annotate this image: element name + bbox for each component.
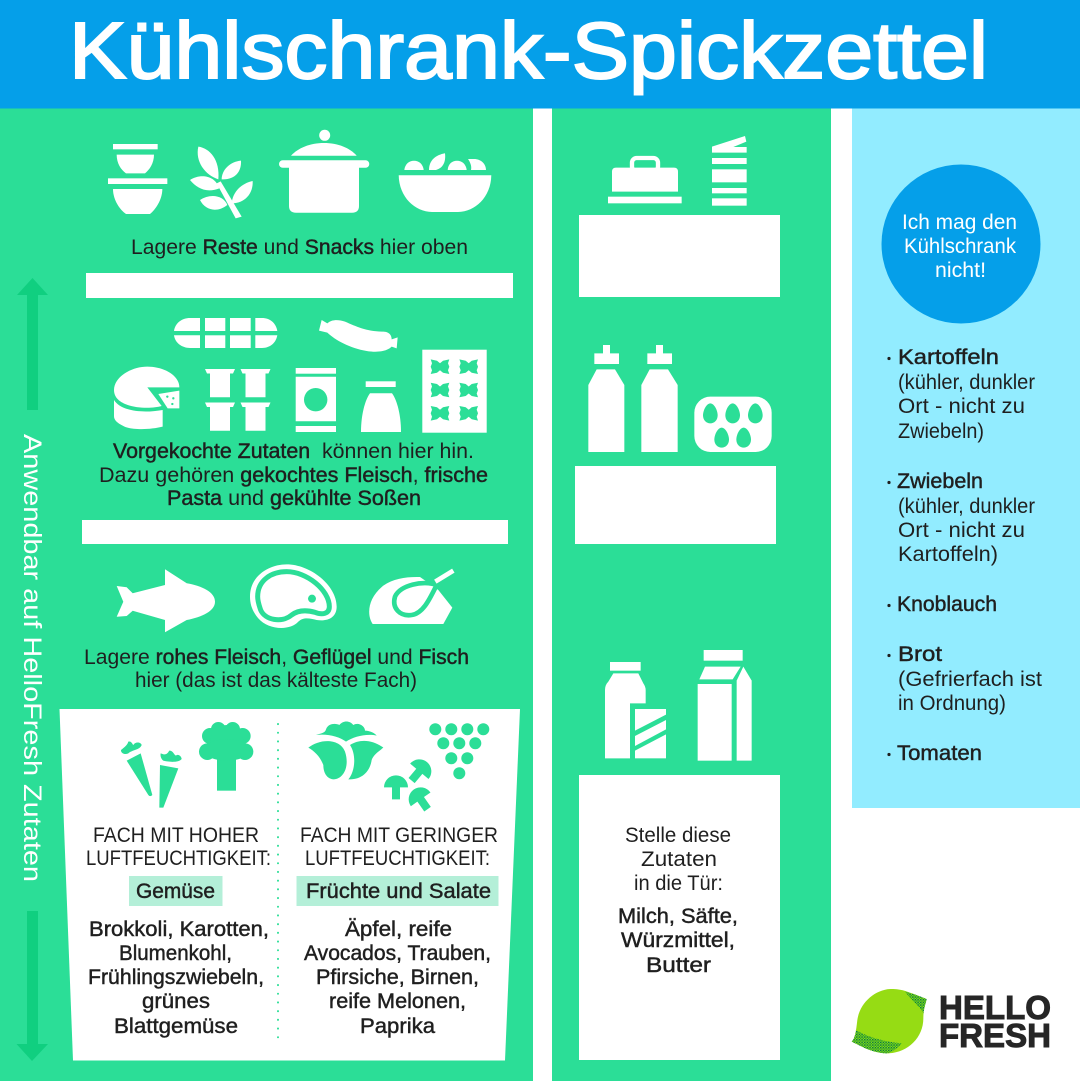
text: fruit list — [304, 918, 491, 1038]
list item: potatoes: Zwiebeln) — [898, 420, 984, 443]
text: vegetable list: grünes — [142, 990, 210, 1013]
text: fruit list: Äpfel, reife — [345, 918, 452, 941]
icon: milk carton — [698, 650, 752, 761]
text: door items: Milch, Säfte, — [618, 905, 738, 928]
text: bottom shelf caption: Lagere rohes Fleisch, Geflügel und Fisch — [84, 646, 469, 669]
label: fruit and salads: Früchte und Salate — [306, 880, 491, 903]
text: low humidity heading: LUFTFEUCHTIGKEIT: — [305, 847, 490, 870]
door shelf: bottom with text — [579, 775, 780, 1060]
text: door items — [618, 905, 738, 977]
shelf: top shelf bar — [86, 273, 513, 298]
text: vertical side label: Anwendbar auf HelloFresh Zutaten — [18, 434, 46, 882]
text: fruit list: Pfirsiche, Birnen, — [316, 966, 479, 989]
list item: bread: (Gefrierfach ist — [898, 668, 1042, 691]
list item: potatoes: Ort - nicht zu — [898, 395, 1025, 418]
icon: fish — [117, 569, 215, 632]
text: low humidity heading — [300, 824, 498, 870]
icon: herb sprig — [190, 147, 253, 218]
text: door items: Würzmittel, — [621, 929, 735, 952]
panel: fridge shelves — [0, 108, 533, 1081]
icon: sauce bottles — [588, 345, 678, 452]
logo: HelloFresh — [852, 989, 1051, 1054]
icon: steak — [250, 564, 337, 628]
icon: lettuce — [308, 721, 383, 779]
text: fruit list: Avocados, Trauben, — [304, 942, 491, 965]
panel: crisper drawers — [60, 709, 520, 1060]
text: vegetable list — [88, 918, 269, 1038]
text: high humidity heading: LUFTFEUCHTIGKEIT: — [86, 847, 271, 870]
label: vegetables — [129, 876, 222, 906]
text: vegetable list: Blattgemüse — [114, 1015, 238, 1038]
text: high humidity heading: FACH MIT HOHER — [93, 824, 259, 847]
label: vegetables: Gemüse — [136, 880, 215, 903]
list item: bread: Brot — [898, 643, 942, 666]
door shelf: middle — [575, 466, 776, 544]
list item: onions: (kühler, dunkler — [898, 495, 1035, 518]
text: door instruction: Stelle diese — [625, 824, 731, 847]
list item: bread — [887, 643, 1042, 715]
text: middle shelf caption: Pasta und gekühlte Soßen — [167, 487, 421, 510]
text: high humidity heading — [86, 824, 271, 870]
icon: butter dish — [608, 158, 682, 203]
text: bottom shelf caption — [84, 646, 469, 692]
icon: sauce pack — [296, 368, 336, 432]
text: vegetable list: Frühlingszwiebeln, — [88, 966, 264, 989]
text: vegetable list: Brokkoli, Karotten, — [89, 918, 269, 941]
icon: poultry — [369, 571, 453, 624]
list item: potatoes — [887, 346, 1035, 443]
text: door items: Butter — [646, 954, 711, 977]
icon: broccoli — [199, 722, 253, 791]
text: top shelf caption: Lagere Reste und Snacks hier oben — [131, 236, 468, 259]
icon: sausage — [319, 320, 398, 352]
wordmark — [939, 989, 1051, 1054]
icon: fresh pasta box — [422, 350, 487, 433]
list item: onions: Ort - nicht zu — [898, 519, 1025, 542]
callout: dislike the fridge — [882, 164, 1040, 324]
text: door instruction: in die Tür: — [634, 872, 723, 895]
arrow: down — [16, 911, 48, 1061]
list item: garlic: Knoblauch — [897, 593, 997, 616]
list: items to keep out of the fridge — [887, 346, 1042, 765]
text: fruit list: Paprika — [360, 1015, 435, 1038]
title: Kühlschrank-Spickzettel — [69, 6, 988, 95]
icon: milk bottle and juice — [605, 662, 666, 758]
callout: dislike the fridge: nicht! — [935, 259, 986, 282]
icon: yoghurt cups — [205, 369, 270, 431]
text: middle shelf caption: Vorgekochte Zutaten können hier hin. — [113, 440, 474, 463]
icon: egg tray — [694, 397, 772, 452]
icon: stacked containers — [108, 144, 167, 214]
icon: stack of cheese slices — [712, 136, 747, 206]
list item: tomatoes: Tomaten — [897, 742, 982, 765]
arrow: up — [17, 278, 48, 410]
text: door instruction: Zutaten — [641, 848, 717, 871]
list item: potatoes: Kartoffeln — [898, 346, 999, 369]
list item: onions: Zwiebeln — [897, 470, 983, 493]
text: low humidity heading: FACH MIT GERINGER — [300, 824, 498, 847]
icon: mushrooms — [384, 754, 437, 816]
text: fruit list: reife Melonen, — [329, 990, 466, 1013]
icon: cooking pot — [279, 130, 369, 213]
header band — [0, 0, 1080, 108]
list item: bread: in Ordnung) — [898, 692, 1006, 715]
text: bottom shelf caption: hier (das ist das kälteste Fach) — [135, 669, 417, 692]
list item: onions: Kartoffeln) — [898, 543, 998, 566]
icon: sliced tofu block — [174, 318, 277, 348]
text: middle shelf caption — [99, 440, 488, 510]
icon: lime — [852, 989, 927, 1053]
text: vegetable list: Blumenkohl, — [119, 942, 232, 965]
callout: dislike the fridge: Kühlschrank — [904, 235, 1016, 258]
text: door instruction — [625, 824, 731, 895]
wordmark: FRESH — [939, 1017, 1051, 1054]
icon: grapes — [429, 723, 489, 779]
icon: jar — [361, 381, 401, 432]
label: fruit and salads — [296, 876, 498, 906]
icon: carrots — [121, 742, 182, 808]
divider between drawers — [277, 724, 279, 1044]
shelf: middle shelf bar — [82, 520, 508, 544]
wordmark: HELLO — [939, 989, 1051, 1026]
list item: potatoes: (kühler, dunkler — [898, 371, 1035, 394]
icon: salad bowl — [399, 153, 491, 212]
callout: dislike the fridge: Ich mag den — [902, 211, 1017, 234]
panel: fridge door — [552, 108, 831, 1081]
text: middle shelf caption: Dazu gehören gekochtes Fleisch, frische — [99, 464, 488, 487]
list item: onions — [887, 470, 1035, 566]
door shelf: top — [579, 215, 780, 297]
icon: cheese wheel — [114, 367, 179, 429]
panel: not in the fridge — [852, 108, 1080, 808]
